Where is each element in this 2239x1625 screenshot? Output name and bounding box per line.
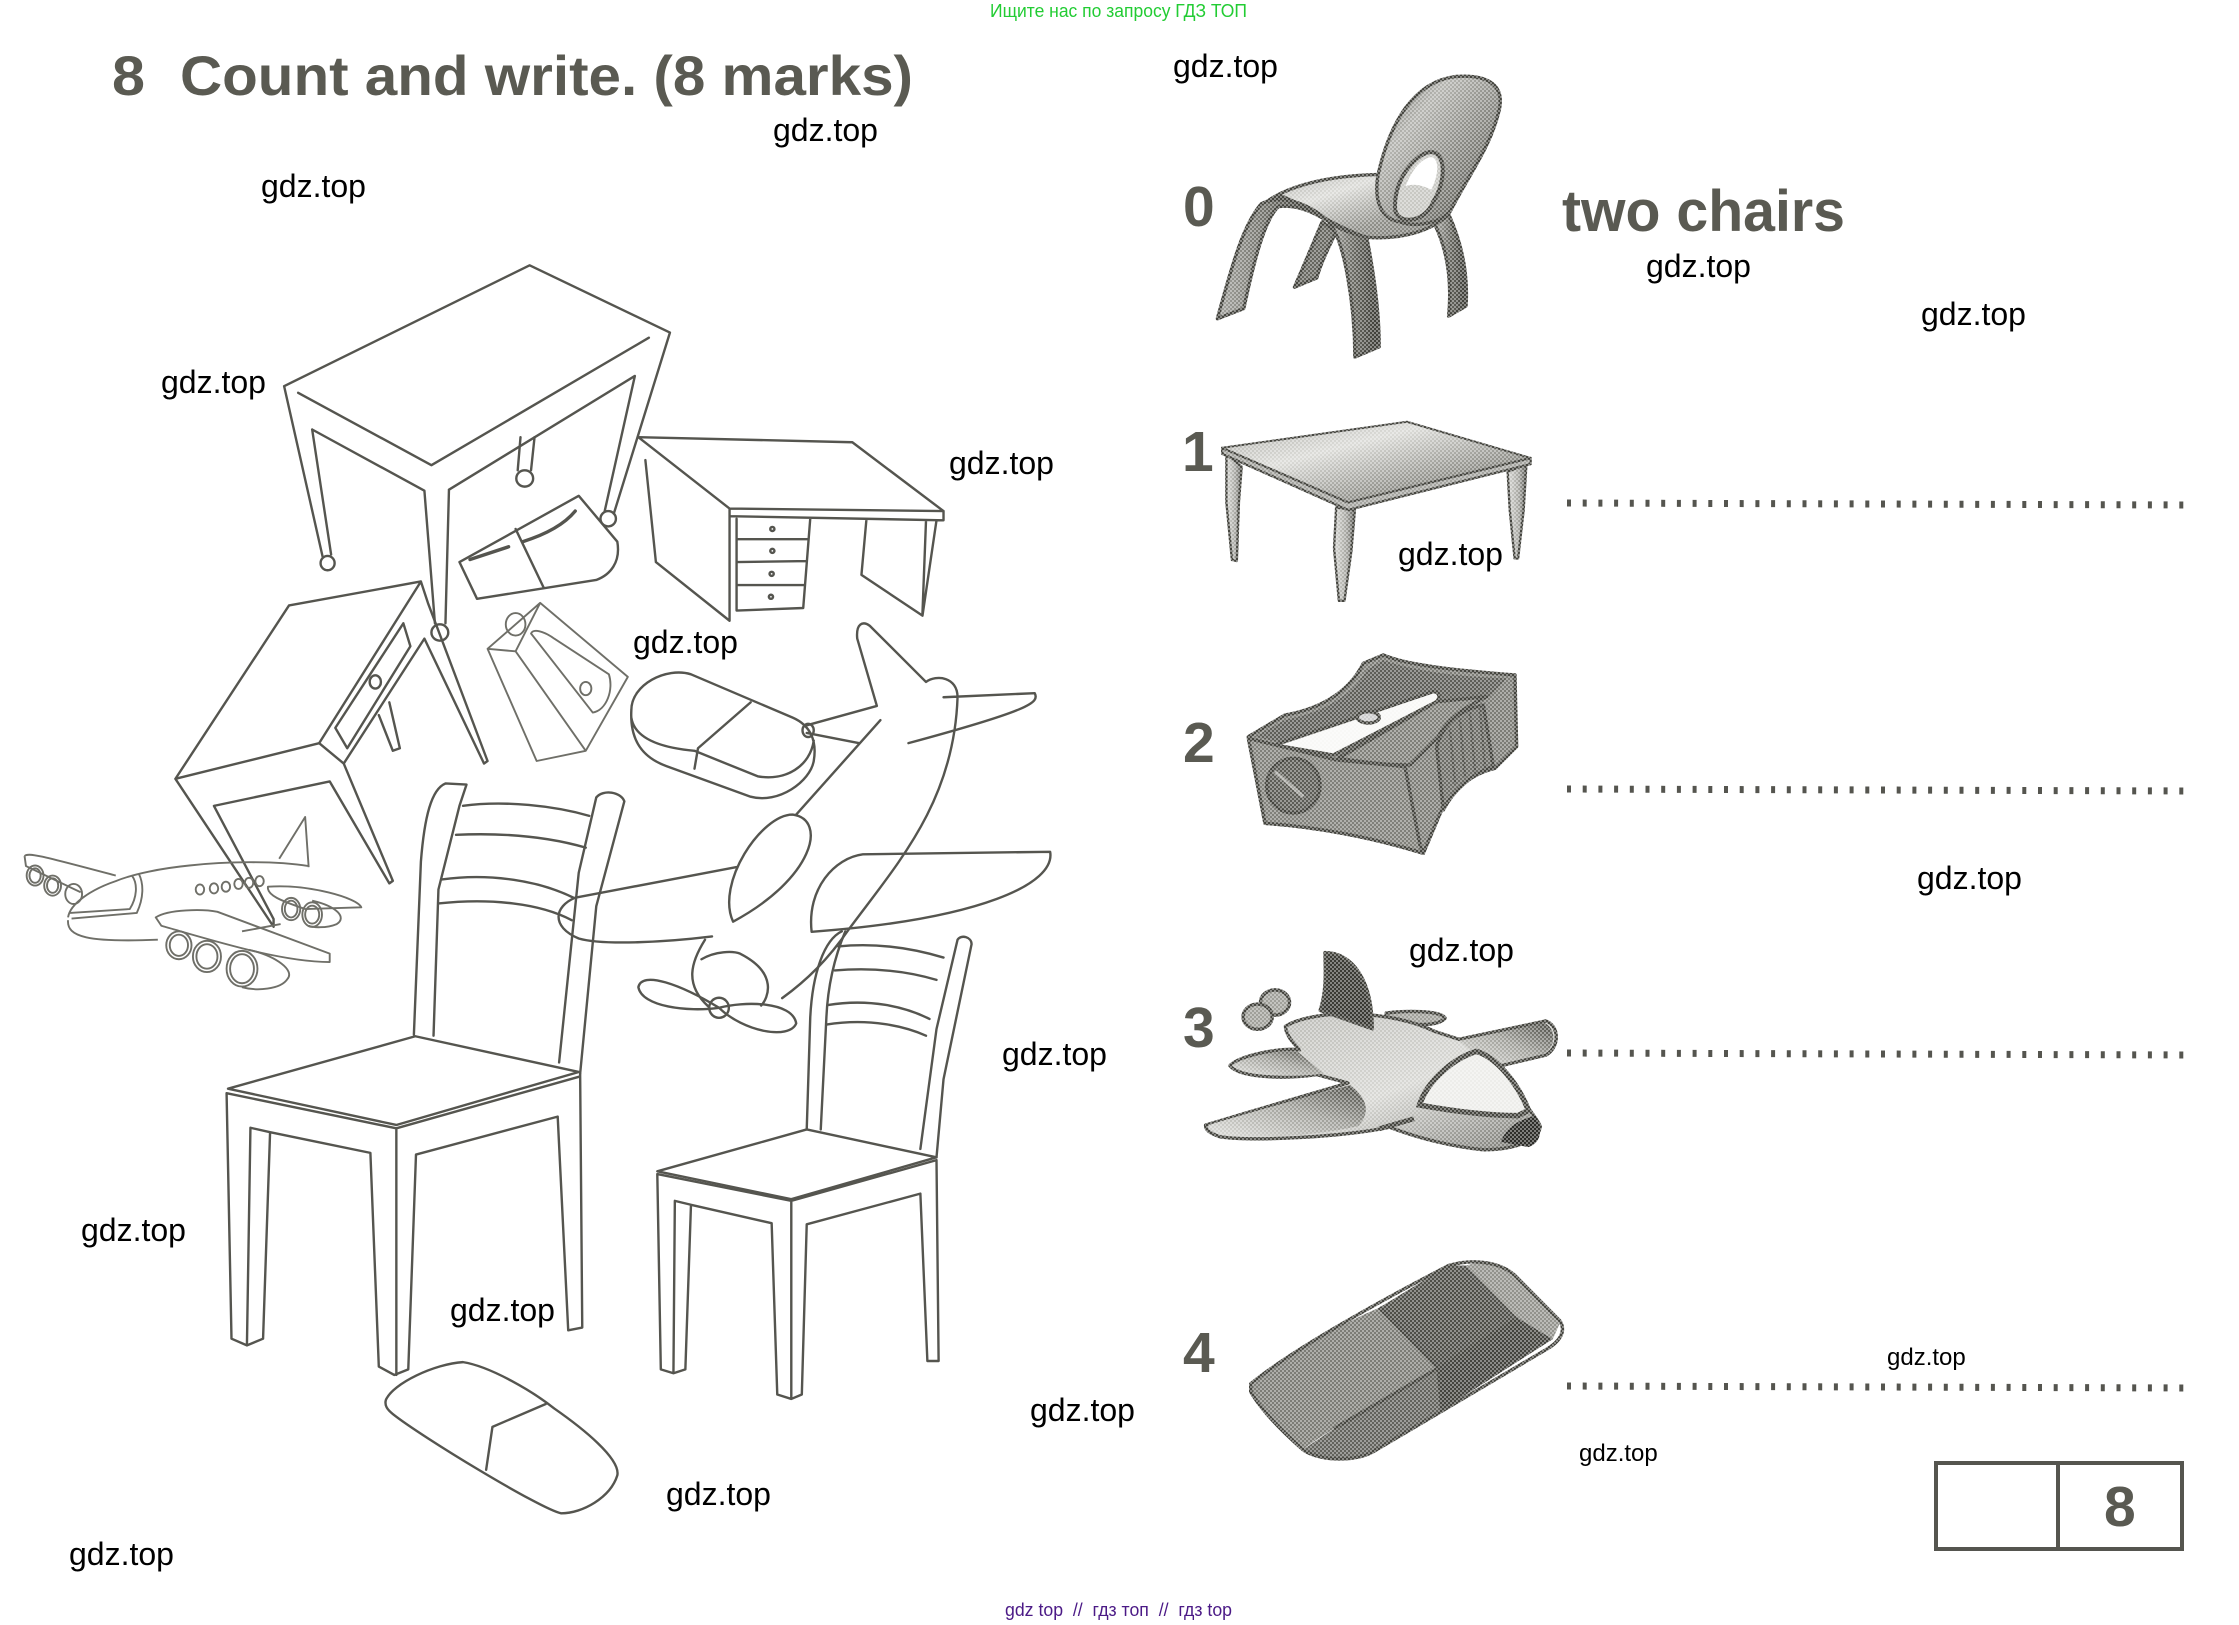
eraser pill — [631, 673, 815, 798]
icon: toy plane — [1206, 953, 1556, 1150]
watermarks: gdz.top — [1173, 48, 1278, 84]
watermarks: gdz.top — [261, 168, 366, 204]
score box: 8 — [2104, 1475, 2136, 1539]
sharpener outline — [488, 603, 628, 761]
icon: chair — [1217, 76, 1500, 357]
big chair — [227, 783, 624, 1375]
icon: sharpener — [1248, 655, 1517, 853]
watermarks: gdz.top — [69, 1536, 174, 1572]
scene: objects on left lower — [25, 783, 972, 1513]
scene: objects on left upper — [175, 265, 1050, 998]
watermarks: gdz.top — [1398, 536, 1503, 572]
propeller and nose — [638, 940, 796, 1032]
score box — [1936, 1463, 2182, 1549]
watermarks: gdz.top — [450, 1292, 555, 1328]
item numbers: 1 — [1182, 420, 1214, 484]
watermarks: gdz.top — [81, 1212, 186, 1248]
watermarks: gdz.top — [1646, 248, 1751, 284]
item numbers: 4 — [1183, 1321, 1215, 1385]
watermarks: gdz.top — [1030, 1392, 1135, 1428]
halftone texture over icons — [1205, 70, 1570, 1470]
icon: table — [1222, 422, 1531, 601]
watermarks: gdz.top — [949, 445, 1054, 481]
table top centre — [284, 265, 670, 641]
item numbers — [1182, 175, 1215, 1385]
item numbers: 3 — [1183, 996, 1215, 1060]
watermarks: gdz.top — [1887, 1344, 1966, 1371]
title: 8 — [112, 44, 145, 107]
jet plane — [25, 817, 361, 989]
eraser bottom — [385, 1362, 618, 1513]
item numbers: 2 — [1183, 711, 1215, 775]
answer lines — [1567, 503, 2189, 1388]
watermarks: gdz.top — [633, 624, 738, 660]
watermarks: gdz.top — [1002, 1036, 1107, 1072]
watermarks: gdz.top — [1579, 1440, 1658, 1467]
small chair — [657, 931, 972, 1399]
watermarks: gdz.top — [1409, 932, 1514, 968]
title: Count and write. (8 marks) — [180, 44, 913, 107]
eraser small — [459, 496, 618, 599]
propeller plane — [559, 623, 1050, 998]
example answer: two chairs — [1562, 179, 1845, 244]
bottom link text: gdz top // гдз топ // гдз top — [1005, 1600, 1232, 1620]
desk — [638, 437, 944, 621]
watermarks: gdz.top — [161, 364, 266, 400]
table rotated — [175, 581, 488, 927]
top link text: Ищите нас по запросу ГДЗ ТОП — [990, 1, 1247, 21]
icon: eraser — [1251, 1262, 1562, 1459]
watermarks: gdz.top — [1917, 860, 2022, 896]
watermarks: gdz.top — [1921, 296, 2026, 332]
watermarks: gdz.top — [666, 1476, 771, 1512]
watermarks: gdz.top — [773, 112, 878, 148]
item numbers: 0 — [1183, 175, 1215, 239]
